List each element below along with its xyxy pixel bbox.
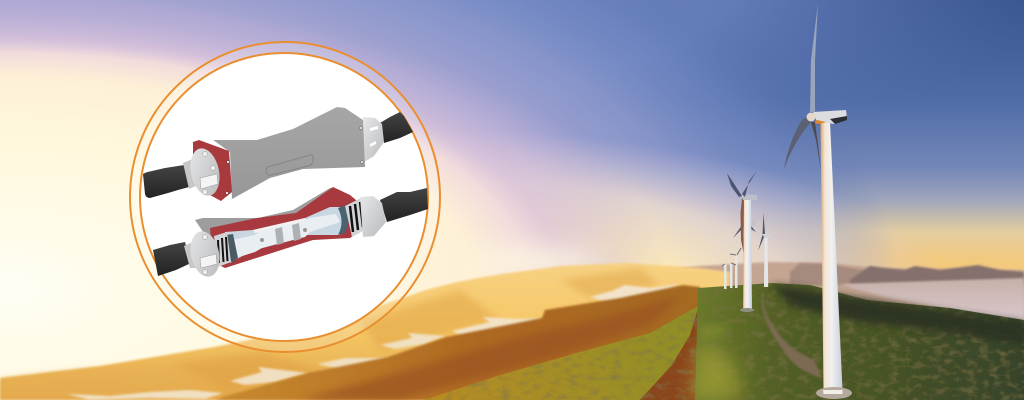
far golden hills: [0, 263, 730, 400]
right cable: [380, 188, 428, 222]
right collar: [363, 117, 384, 162]
left cable: [153, 242, 191, 276]
dirt path: [762, 293, 822, 378]
inner conductor: [232, 214, 340, 258]
right cable: [380, 112, 413, 143]
red cut section: [210, 187, 362, 268]
right collar: [360, 196, 386, 237]
left collar: [183, 158, 198, 189]
turbine: second: [727, 171, 757, 312]
left cable: [143, 165, 189, 198]
distant mountains and mist: [640, 262, 1024, 340]
inner white disc: [140, 53, 428, 341]
grey rear housing: [195, 188, 340, 245]
left slotted sleeve: [214, 232, 231, 267]
red flange: [193, 140, 232, 201]
inner cavity: [225, 207, 345, 263]
callout: circular product inset: [130, 42, 440, 352]
outer orange ring: [130, 42, 440, 352]
foreground hillside slope: [215, 285, 703, 400]
turbine: third: [758, 213, 770, 287]
left collar: [184, 241, 198, 268]
mist pools on the hills: [590, 284, 679, 303]
grey housing: [213, 107, 365, 199]
green hilltop ground: [690, 283, 1024, 400]
illustration: cut-away cable joint: [153, 187, 428, 279]
illustration: closed cable joint: [143, 107, 413, 201]
turbine: main: [784, 3, 852, 399]
right slotted sleeve: [345, 198, 368, 237]
small distant turbines: [722, 248, 741, 289]
